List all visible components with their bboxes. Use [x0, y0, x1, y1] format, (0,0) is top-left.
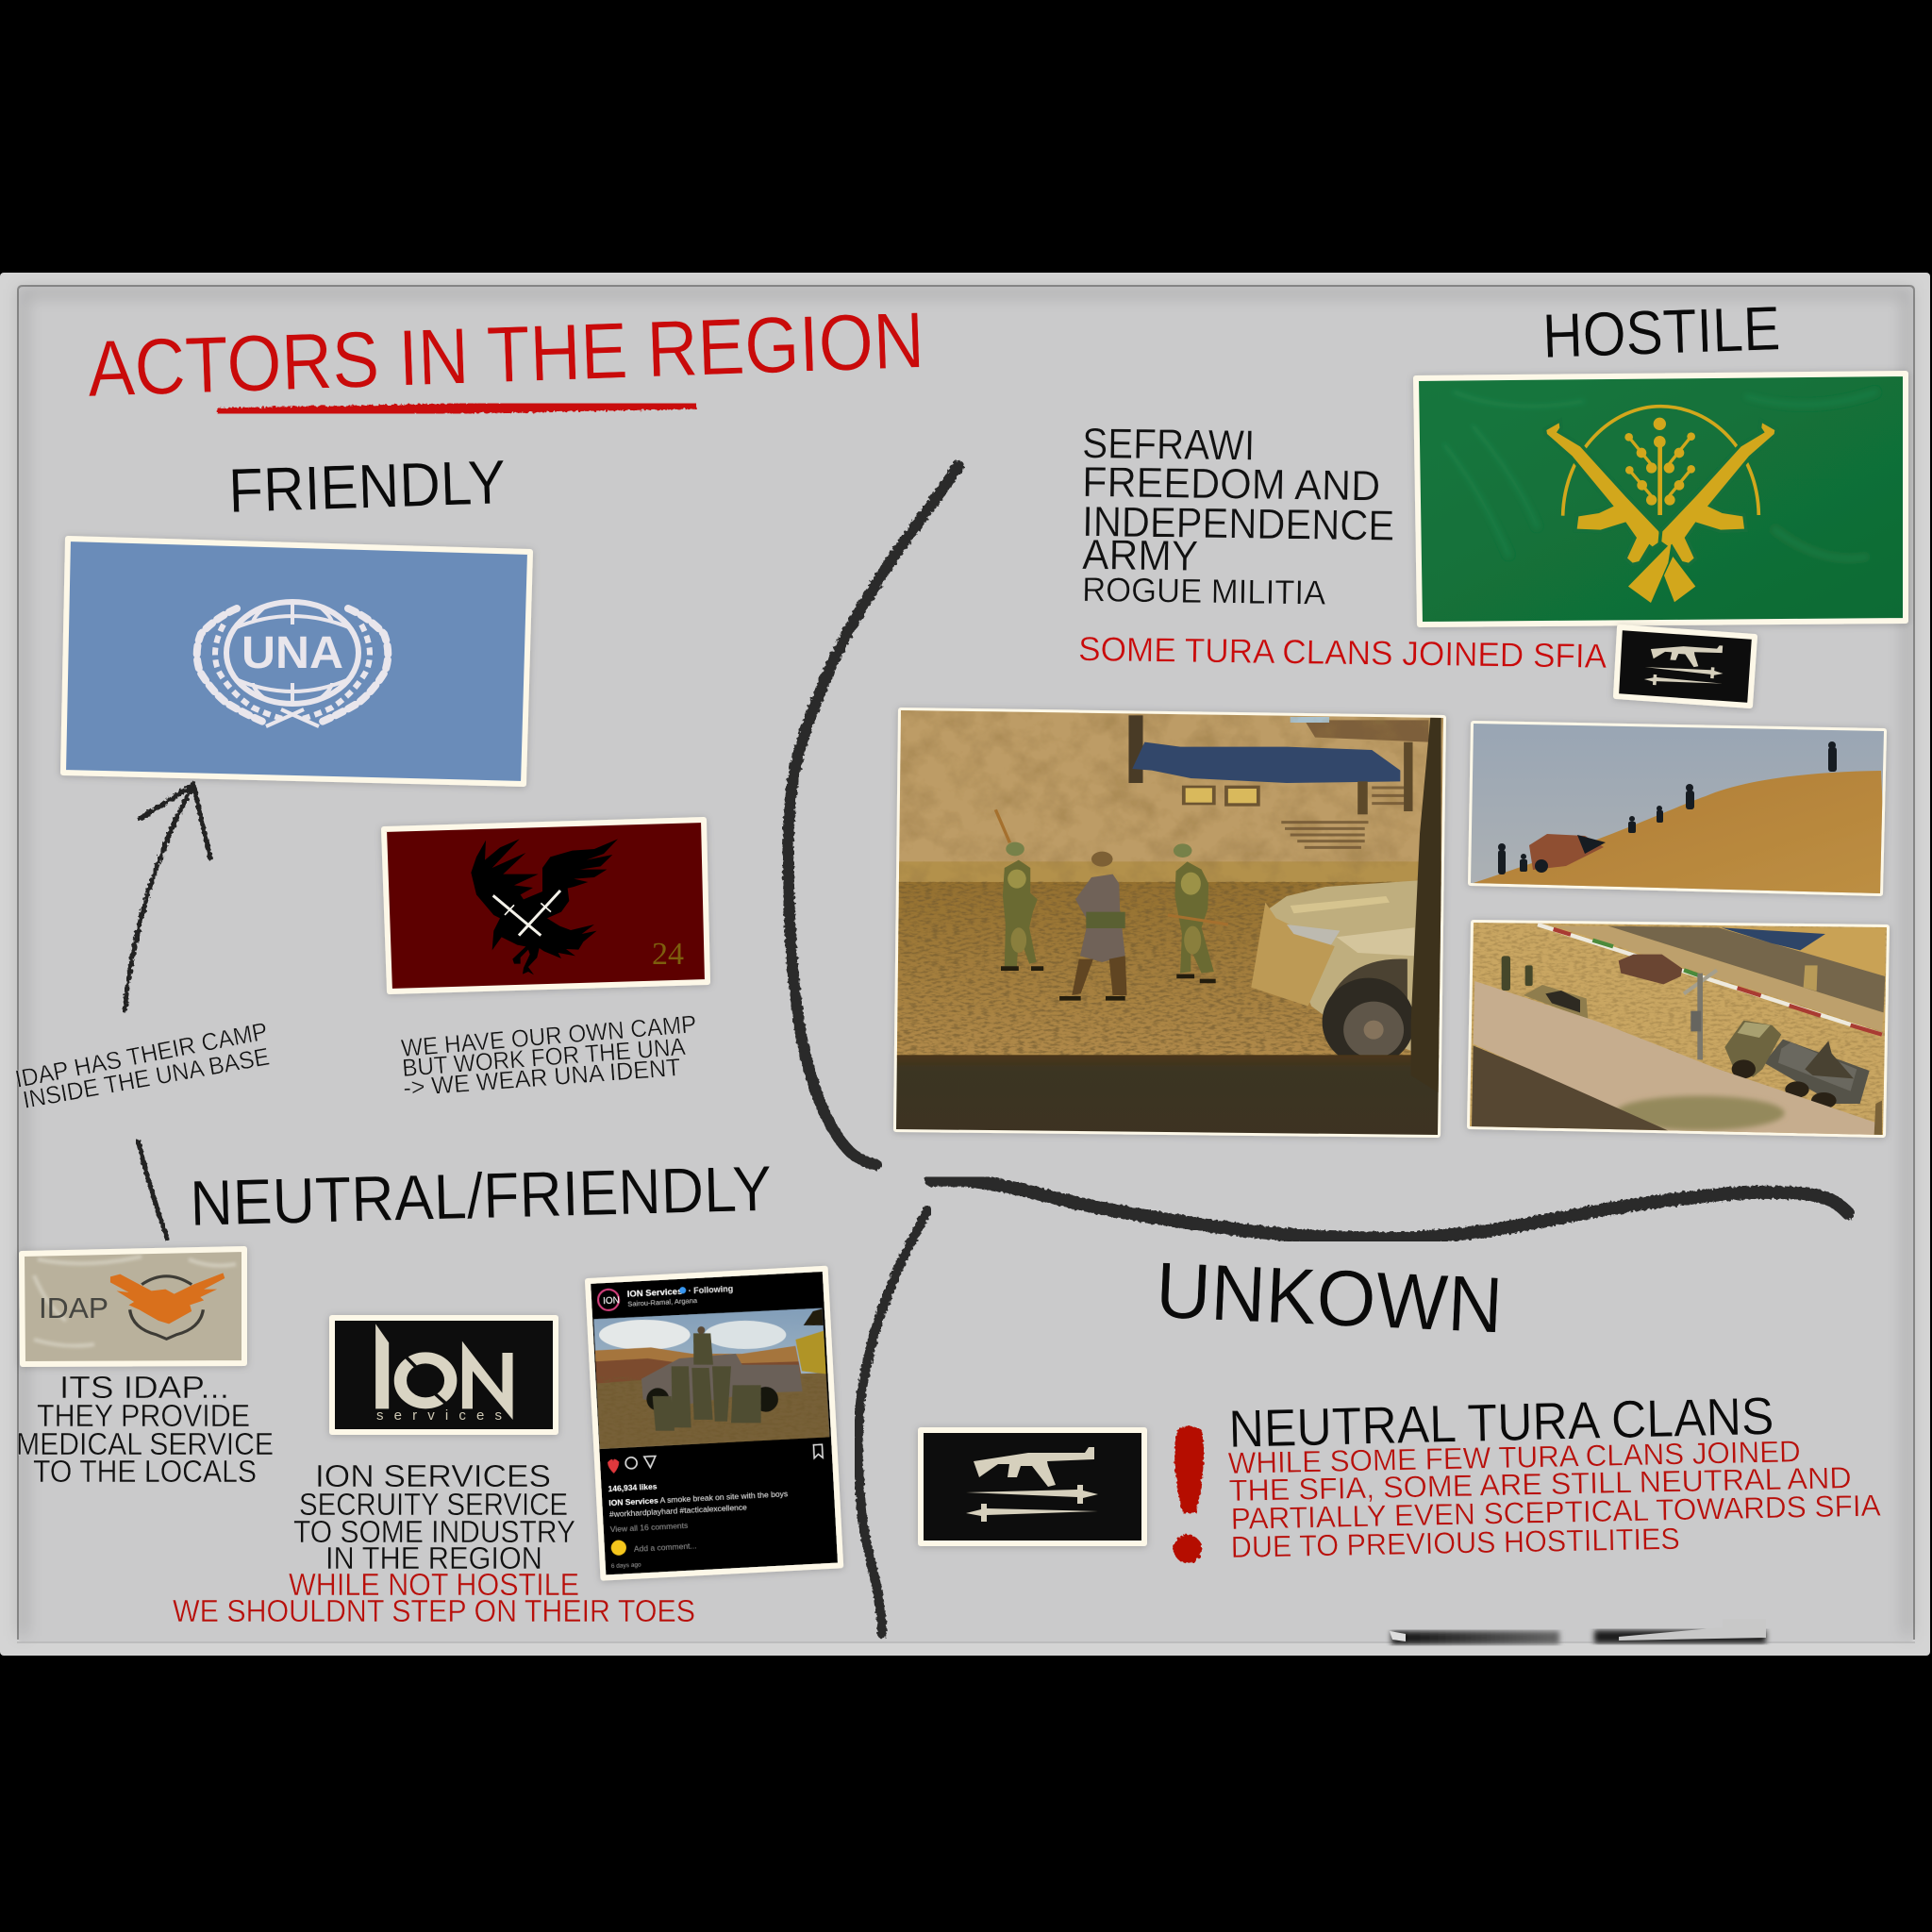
- post caption: 6 days ago: [611, 1561, 641, 1570]
- text: ION description: [173, 1458, 695, 1628]
- post header: Sairou-Ramal, Argana: [627, 1296, 698, 1308]
- text: neutral Tura description: PARTIALLY EVEN SCEPTICAL TOWARDS SFIA: [1230, 1489, 1882, 1536]
- post caption: [607, 1474, 791, 1570]
- panel: IDAP flag: [22, 1249, 244, 1364]
- text: neutral Tura description: DUE TO PREVIOUS HOSTILITIES: [1230, 1522, 1680, 1564]
- text: SFIA name: INDEPENDENCE: [1082, 497, 1395, 550]
- heading: hostile: HOSTILE: [1541, 292, 1781, 371]
- text: ION description: ION SERVICES: [315, 1458, 551, 1493]
- icon: crow with crossed swords: [471, 839, 618, 974]
- post caption: ION Services A smoke break on site with the boys: [608, 1489, 788, 1507]
- post header: ION: [603, 1295, 620, 1307]
- icon: IDAP handshake logo: [39, 1273, 225, 1339]
- icon: rifle and swords: [1644, 641, 1725, 690]
- text: ION description: SECRUITY SERVICE: [299, 1487, 568, 1522]
- post header: ION Services: [627, 1287, 683, 1300]
- photo: main soldiers scene: [896, 708, 1453, 1137]
- post actions: [608, 1444, 823, 1474]
- icon: exclamation mark: [1174, 1426, 1204, 1563]
- note: own camp: [400, 1009, 697, 1102]
- photo: checkpoint scene: [1467, 915, 1891, 1141]
- text: IDAP description: TO THE LOCALS: [33, 1454, 257, 1489]
- heading: neutral friendly: NEUTRAL/FRIENDLY: [189, 1153, 773, 1240]
- panel: Instagram post: [575, 1268, 854, 1578]
- icon: UNA emblem: [197, 602, 388, 726]
- text: IDAP description: [16, 1370, 274, 1489]
- text: IDAP description: MEDICAL SERVICE: [16, 1426, 274, 1461]
- heading: unknown: UNKOWN: [1154, 1245, 1505, 1350]
- post header: · Following: [688, 1284, 733, 1295]
- note: IDAP camp: INSIDE THE UNA BASE: [21, 1041, 272, 1114]
- note: IDAP camp: IDAP HAS THEIR CAMP: [12, 1017, 270, 1093]
- post caption: 146,934 likes: [608, 1481, 658, 1493]
- icon: ION logo: [375, 1324, 513, 1424]
- text: ION description: WHILE NOT HOSTILE: [289, 1567, 579, 1602]
- panel: UNA flag: [63, 539, 530, 784]
- note: Tura clans joined: SOME TURA CLANS JOINED SFIA: [1078, 629, 1607, 675]
- text: ION description: TO SOME INDUSTRY: [293, 1514, 575, 1549]
- post photo: [593, 1307, 830, 1449]
- title underline: [217, 404, 696, 413]
- panel: SFIA flag: [1416, 374, 1906, 625]
- heading: friendly: FRIENDLY: [227, 446, 507, 525]
- text: neutral Tura description: THE SFIA, SOME ARE STILL NEUTRAL AND: [1228, 1460, 1852, 1507]
- note: own camp: -> WE WEAR UNA IDENT: [402, 1053, 682, 1102]
- arrow: IDAP to UNA: [125, 785, 210, 1010]
- post header: [598, 1283, 734, 1310]
- text: IDAP description: ITS IDAP...: [59, 1370, 229, 1405]
- panel: ION flag: [332, 1318, 556, 1432]
- whiteboard: [0, 273, 1930, 1656]
- text: SFIA name: FREEDOM AND: [1082, 458, 1381, 509]
- panel: Tura clan flag: [921, 1430, 1144, 1543]
- post caption: View all 16 comments: [610, 1521, 688, 1534]
- post caption: Add a comment...: [634, 1541, 697, 1554]
- text: SFIA name: ARMY: [1082, 530, 1199, 580]
- divider: horizontal wavy line: [931, 1180, 1848, 1239]
- icon: UNA emblem: UNA: [242, 628, 343, 678]
- text: SFIA name: [1082, 419, 1395, 612]
- text: neutral Tura description: [1227, 1434, 1882, 1564]
- panel: small Tura flag: [1616, 627, 1755, 706]
- text: ION description: WE SHOULDNT STEP ON THEIR TOES: [173, 1593, 695, 1628]
- text: SFIA name: SEFRAWI: [1082, 419, 1256, 470]
- icon: ION logo: services: [376, 1407, 502, 1424]
- panel: crow flag: [384, 820, 708, 991]
- vehicle and figures: [1498, 741, 1837, 874]
- armored vehicle: [1251, 880, 1418, 1066]
- text: neutral Tura description: WHILE SOME FEW TURA CLANS JOINED: [1227, 1434, 1801, 1480]
- board markers: [1390, 1619, 1766, 1644]
- title: ACTORS IN THE REGION: [86, 295, 925, 413]
- divider: upper vertical line: [788, 466, 958, 1165]
- note: own camp: BUT WORK FOR THE UNA: [401, 1032, 687, 1082]
- divider: lower vertical line: [858, 1210, 927, 1634]
- soldier figures: [995, 809, 1228, 998]
- icon: rifle and swords: [966, 1447, 1098, 1522]
- icon: crossed rifles emblem: [1546, 407, 1774, 603]
- text: IDAP description: THEY PROVIDE: [37, 1398, 250, 1433]
- photo: dune scene: [1467, 717, 1891, 901]
- text: SFIA name: ROGUE MILITIA: [1082, 570, 1325, 612]
- connector line to IDAP: [138, 1140, 168, 1241]
- note: own camp: WE HAVE OUR OWN CAMP: [400, 1009, 697, 1062]
- post caption: #workhardplayhard #tacticalexcellence: [609, 1502, 747, 1519]
- icon: IDAP handshake logo: IDAP: [39, 1291, 108, 1324]
- heading: neutral Tura clans: NEUTRAL TURA CLANS: [1228, 1386, 1774, 1458]
- flag number: 24: [652, 937, 684, 972]
- text: ION description: IN THE REGION: [325, 1541, 542, 1575]
